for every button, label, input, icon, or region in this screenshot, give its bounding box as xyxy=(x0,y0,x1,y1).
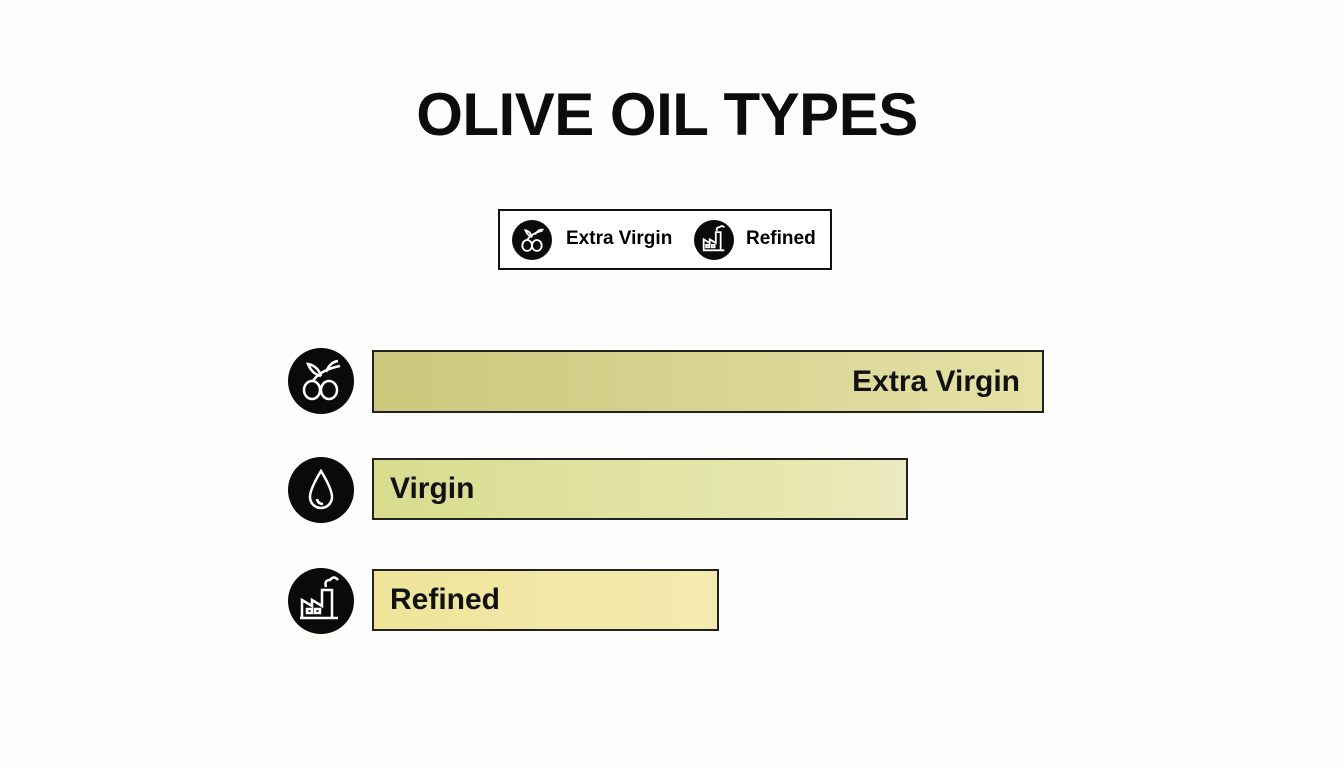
bar: Refined: Refined xyxy=(390,583,500,616)
legend icon: olives xyxy=(512,220,552,260)
legend label: Extra Virgin: Extra Virgin xyxy=(566,228,672,249)
bar: Virgin: Virgin xyxy=(390,472,474,505)
icon: olives xyxy=(288,348,354,414)
icon: drop xyxy=(288,457,354,523)
legend label: Refined: Refined xyxy=(746,228,816,249)
title: OLIVE OIL TYPES xyxy=(416,81,918,148)
legend icon: factory xyxy=(694,220,734,260)
bar: Extra Virgin: Extra Virgin xyxy=(852,364,1020,398)
icon: factory xyxy=(288,568,354,634)
bar: Virgin xyxy=(372,458,908,520)
bar: Extra Virgin xyxy=(372,350,1044,413)
bar: Refined xyxy=(372,569,719,631)
legend xyxy=(498,209,832,270)
